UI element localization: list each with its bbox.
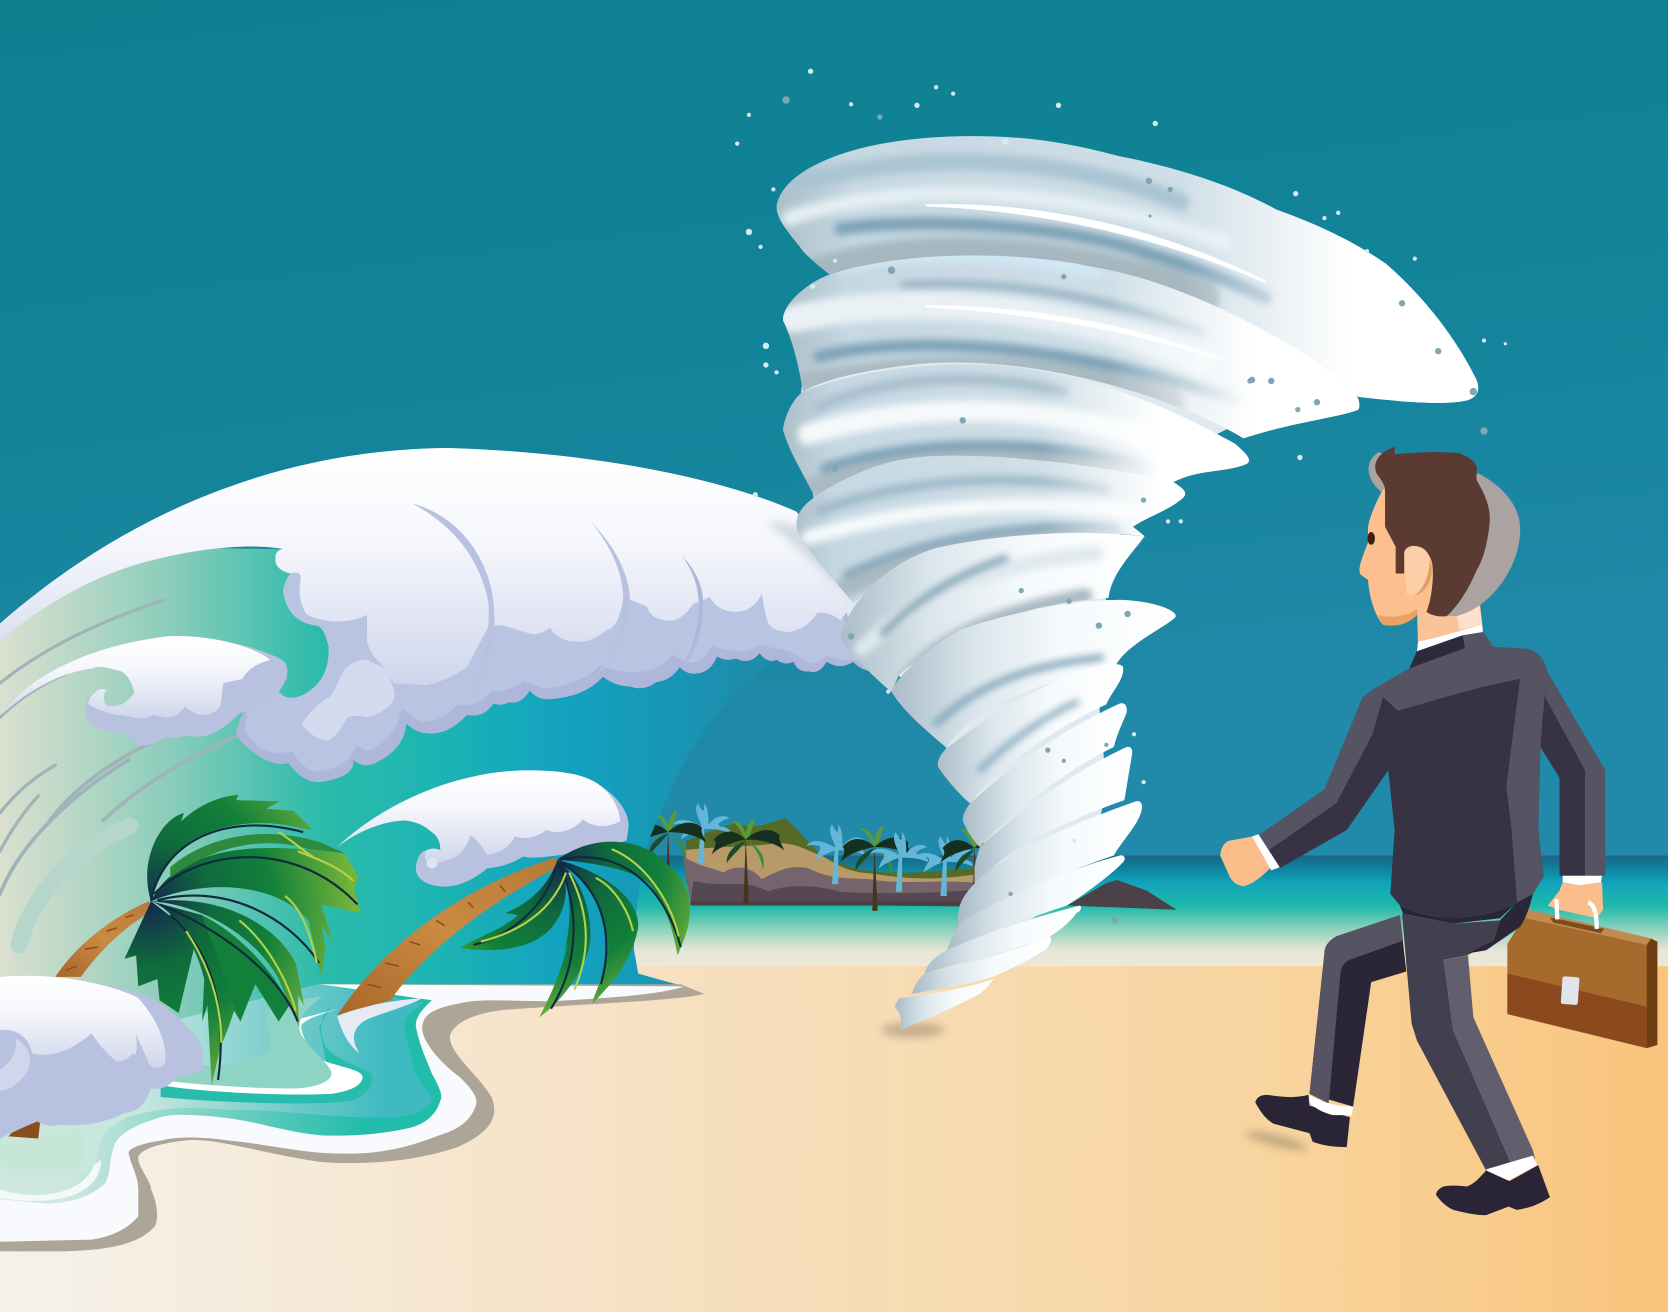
near arm highlight bbox=[1258, 688, 1383, 851]
collar dark bbox=[1410, 635, 1465, 668]
collar grey bbox=[1463, 632, 1494, 648]
shirt collar bbox=[1417, 625, 1483, 651]
near leg highlight bbox=[1444, 956, 1535, 1167]
tornado band 1 bbox=[766, 128, 1489, 415]
tornado band 9 bbox=[974, 747, 1132, 894]
businessman walking bbox=[1220, 447, 1605, 1215]
palm tree right bbox=[337, 842, 690, 1017]
tornado band 11 bbox=[947, 855, 1125, 950]
tornado band 6 bbox=[888, 596, 1181, 750]
tornado band 8 bbox=[963, 703, 1127, 847]
far arm bbox=[1540, 681, 1585, 876]
ear bbox=[1404, 547, 1431, 596]
shoulder highlight bbox=[1374, 647, 1547, 902]
tornado band 3 bbox=[777, 362, 1266, 500]
man ground shadow bbox=[1244, 1128, 1309, 1154]
flying debris particles bbox=[735, 69, 1507, 924]
far hand bbox=[1548, 882, 1603, 918]
ear shadow bbox=[1413, 559, 1432, 596]
eye bbox=[1367, 532, 1375, 545]
main wave water body bbox=[0, 548, 777, 1170]
hair bbox=[1375, 447, 1490, 616]
near shoe bbox=[1436, 1165, 1550, 1215]
medium foam crest bbox=[0, 636, 287, 746]
jacket hem bbox=[1400, 902, 1517, 924]
big curling wave foam bbox=[0, 448, 889, 782]
shoreline water with foam bands bbox=[0, 984, 704, 1251]
near cuff bbox=[1252, 834, 1280, 870]
chin shadow bbox=[1378, 609, 1417, 626]
near leg bbox=[1402, 914, 1513, 1170]
face bbox=[1359, 489, 1436, 626]
background sky bbox=[0, 0, 1668, 858]
tornado band 13 bbox=[912, 936, 1051, 994]
far shoe bbox=[1255, 1095, 1350, 1147]
tornado ground shadow bbox=[881, 1023, 945, 1037]
thigh shadow bbox=[1468, 894, 1533, 953]
far leg bbox=[1310, 915, 1406, 1107]
jacket bbox=[1383, 632, 1547, 917]
far arm highlight bbox=[1529, 649, 1605, 876]
tornado band 4 bbox=[787, 452, 1191, 607]
near sock band bbox=[1486, 1156, 1537, 1180]
sea bbox=[0, 856, 1668, 968]
neck light bbox=[1455, 607, 1482, 630]
tornado band 10 bbox=[958, 801, 1142, 931]
tornado funnel bbox=[766, 128, 1489, 1030]
briefcase bbox=[1507, 910, 1657, 1048]
near hand bbox=[1220, 836, 1271, 886]
second small wave bbox=[337, 770, 629, 887]
palm tree left bbox=[55, 795, 361, 1085]
wave inner streaks bbox=[0, 600, 236, 945]
distant island with palms bbox=[634, 803, 1177, 912]
sandy beach bbox=[0, 966, 1668, 1312]
far leg highlight bbox=[1310, 915, 1403, 1103]
near arm dark bbox=[1267, 697, 1397, 868]
tornado core backing bbox=[798, 277, 1277, 984]
far cuff bbox=[1563, 876, 1602, 885]
far sock band bbox=[1310, 1095, 1353, 1115]
tornado band 5 bbox=[840, 533, 1144, 692]
hair back grey bbox=[1369, 452, 1520, 616]
tornado band 14 bbox=[895, 979, 994, 1030]
briefcase handle bbox=[1556, 899, 1597, 929]
tornado band 2 bbox=[783, 256, 1360, 438]
front foam wave with buried trunk bbox=[0, 976, 204, 1139]
tornado band 7 bbox=[934, 662, 1125, 806]
tornado band 12 bbox=[924, 906, 1081, 974]
neck bbox=[1417, 601, 1483, 645]
